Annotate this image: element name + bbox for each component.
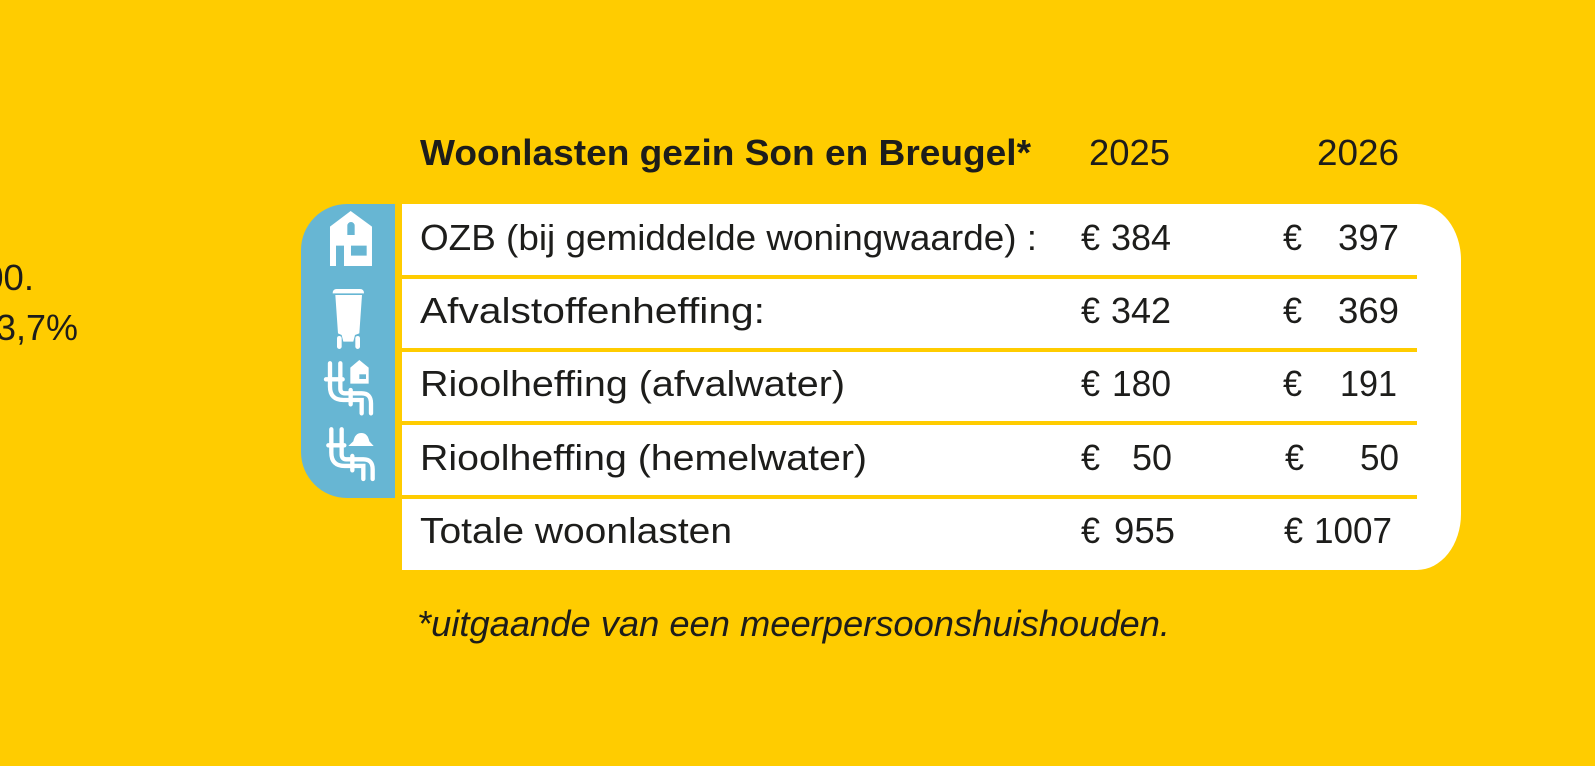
footnote: *uitgaande van een meerpersoonshuishouden. xyxy=(417,603,1170,644)
row: Rioolheffing afvalwater: € xyxy=(1283,363,1302,404)
clipped text block at left edge xyxy=(0,257,78,348)
table heading: 2025 xyxy=(1089,132,1170,173)
row: Totale woonlasten: Totale woonlasten xyxy=(420,510,732,551)
row dividers xyxy=(402,275,1417,499)
row: Afvalstoffenheffing: 342 xyxy=(1111,290,1171,331)
row: Afvalstoffenheffing: € xyxy=(1081,290,1100,331)
row: Rioolheffing afvalwater: 191 xyxy=(1340,363,1397,404)
table heading xyxy=(420,132,1399,173)
row: Totale woonlasten: 955 xyxy=(1114,510,1175,551)
table heading: 2026 xyxy=(1317,132,1399,173)
row: Totale woonlasten: € xyxy=(1284,510,1303,551)
row: Rioolheffing hemelwater: € xyxy=(1081,437,1100,478)
row: Afvalstoffenheffing: € xyxy=(1283,290,1302,331)
row: OZB: 384 xyxy=(1111,217,1171,258)
row: Afvalstoffenheffing: 369 xyxy=(1338,290,1399,331)
row: Rioolheffing hemelwater xyxy=(420,437,1399,478)
icon: sewer pipes with rain cloud xyxy=(328,429,374,479)
panel: table background xyxy=(402,204,1461,570)
row: Rioolheffing hemelwater: 50 xyxy=(1360,437,1399,478)
row: OZB: 397 xyxy=(1338,217,1399,258)
row: Rioolheffing afvalwater: 180 xyxy=(1112,363,1171,404)
icon: waste bin xyxy=(333,289,364,349)
table heading: Woonlasten gezin Son en Breugel* xyxy=(420,132,1032,173)
row: OZB: € xyxy=(1283,217,1302,258)
row: Totale woonlasten: € xyxy=(1081,510,1100,551)
row: Totale woonlasten xyxy=(420,510,1392,551)
icon: house xyxy=(330,211,372,266)
row: Rioolheffing afvalwater: Rioolheffing (afvalwater) xyxy=(420,363,845,404)
row: Rioolheffing afvalwater: € xyxy=(1081,363,1100,404)
row: Afvalstoffenheffing xyxy=(420,290,1399,331)
row: Afvalstoffenheffing: Afvalstoffenheffing: xyxy=(420,290,765,331)
row: OZB xyxy=(420,217,1399,258)
row: Rioolheffing hemelwater: Rioolheffing (hemelwater) xyxy=(420,437,867,478)
row: Rioolheffing hemelwater: 50 xyxy=(1132,437,1172,478)
row: Rioolheffing hemelwater: € xyxy=(1285,437,1304,478)
row: Totale woonlasten: 1007 xyxy=(1314,510,1392,551)
panel: icon strip xyxy=(301,204,395,498)
row: OZB: OZB (bij gemiddelde woningwaarde) : xyxy=(420,217,1037,258)
icon: sewer pipes with house xyxy=(326,360,371,413)
row: OZB: € xyxy=(1081,217,1100,258)
row: Rioolheffing afvalwater xyxy=(420,363,1397,404)
